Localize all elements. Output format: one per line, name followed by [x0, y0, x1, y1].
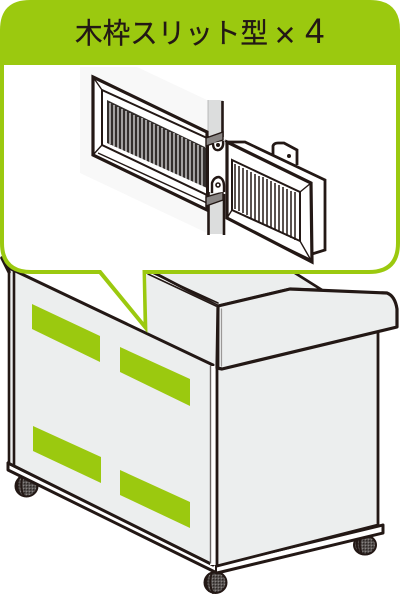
left vent frame	[93, 77, 208, 210]
base plate	[8, 463, 383, 573]
wheel: back left	[16, 476, 38, 496]
green slit: upper left	[32, 304, 100, 362]
wheel: front centre	[204, 572, 226, 593]
mounting tape: upper	[206, 132, 223, 146]
title: 4	[305, 12, 324, 51]
mounting tape: lower	[206, 192, 223, 206]
back panel behind the callout tail	[145, 272, 218, 366]
bracket: upper	[213, 141, 223, 150]
lid	[217, 289, 397, 369]
illustration: slit vent and wall stud	[80, 67, 325, 262]
title: 木枠スリット型	[75, 18, 268, 50]
title: ×	[274, 14, 296, 55]
green slit: upper right	[120, 347, 190, 406]
right vent box	[227, 142, 325, 262]
green slit: lower right	[120, 470, 190, 528]
title	[75, 12, 324, 55]
wall shadow	[80, 67, 207, 233]
bracket: lower	[212, 177, 224, 193]
side panel	[8, 268, 213, 566]
wheel: right	[354, 536, 376, 554]
wall stud	[208, 100, 224, 235]
cabinet illustration	[2, 258, 397, 593]
cabinet back top surface	[145, 268, 322, 306]
callout bubble	[0, 0, 400, 333]
green slit: lower left	[33, 426, 101, 483]
right panel	[217, 328, 378, 566]
